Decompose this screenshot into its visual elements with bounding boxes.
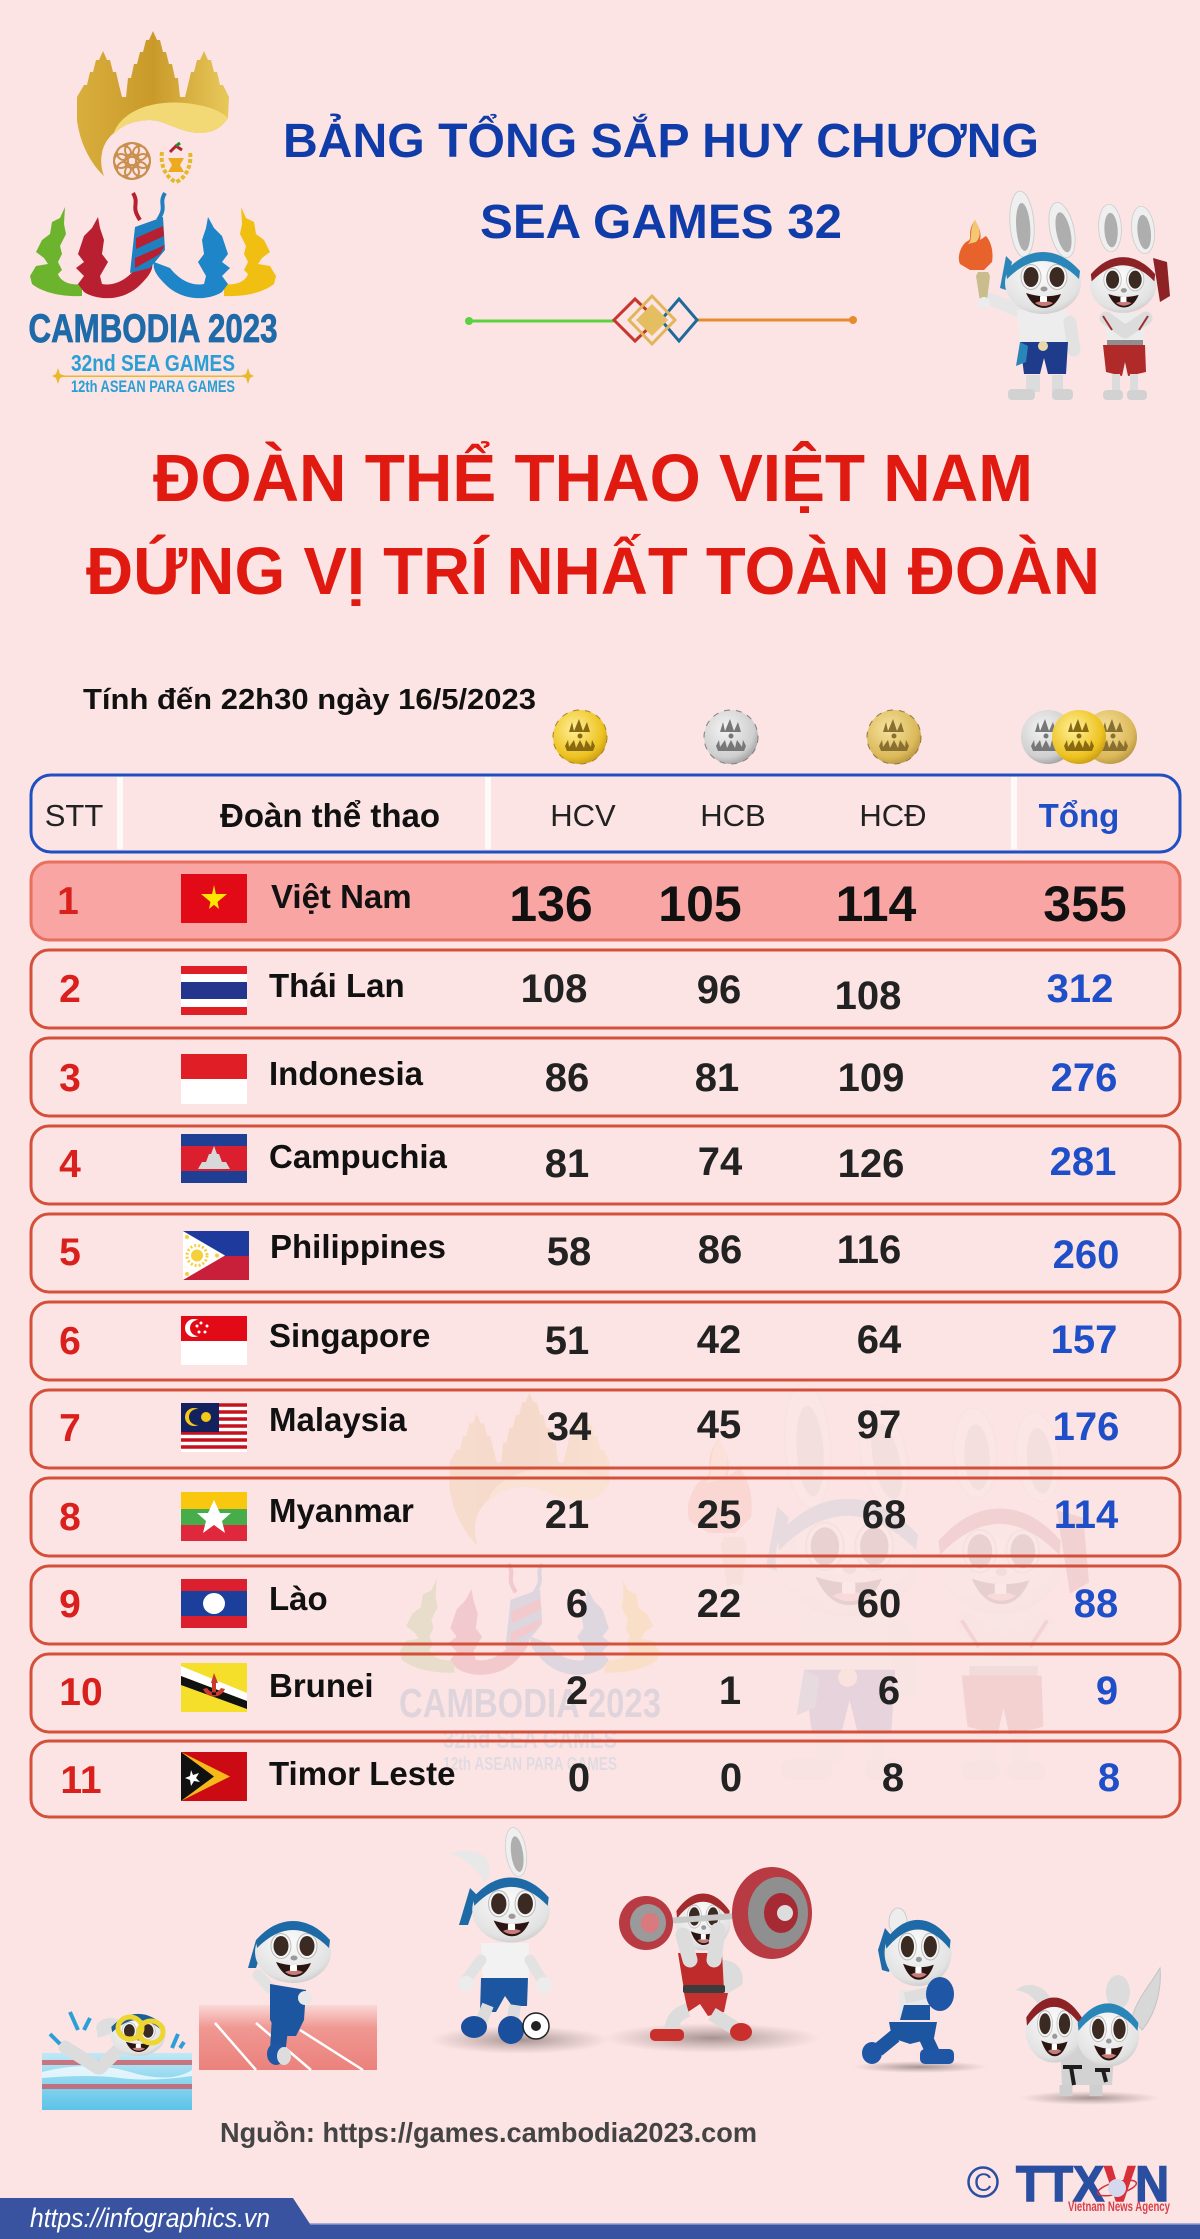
crown [77,31,229,176]
row 3: Indonesia: 276 [1051,1056,1117,1100]
row 5: Philippines: 5 [59,1231,81,1274]
row 6: Singapore: 51 [545,1319,589,1363]
row 4: Campuchia: Campuchia [269,1138,448,1175]
logo para games: 12th ASEAN PARA GAMES [71,377,235,396]
flag: Singapore [181,1316,247,1365]
icon: three medals [1021,710,1137,764]
logo: Cambodia 2023 SEA Games [28,31,278,396]
emblem: flower [114,143,150,179]
row 2: Thái Lan: 312 [1047,967,1113,1011]
logo wordmark: CAMBODIA 2023 [28,307,278,351]
flag: Vietnam [181,874,247,923]
row 8: Myanmar [31,1478,1180,1556]
row 1: Việt Nam: 136 [509,876,593,932]
row 3: Indonesia: 86 [545,1056,589,1100]
TTXVN logo [968,2156,1170,2214]
table header: Tổng [1039,797,1119,834]
row 7: Malaysia: 34 [547,1405,592,1449]
row 6: Singapore: 64 [857,1318,902,1362]
row 1: Việt Nam: Việt Nam [271,878,412,915]
row 11: Timor Leste: 0 [568,1756,590,1800]
row 4: Campuchia: 126 [838,1142,904,1186]
mascot: boxer [852,1908,988,2073]
row 9: Lào: Lào [269,1580,328,1617]
title ornament [465,296,857,344]
mascot: soccer player [430,1826,610,2054]
row 6: Singapore: 42 [697,1318,741,1362]
row 10: Brunei: 10 [59,1671,103,1714]
row 7: Malaysia: 176 [1053,1405,1119,1449]
row 4: Campuchia: 81 [545,1142,589,1186]
row 10: Brunei: Brunei [269,1667,374,1704]
row 2: Thái Lan: Thái Lan [269,967,405,1004]
faded watermark: logo and mascots: 32nd SEA GAMES [443,1726,617,1754]
footer bar [0,2198,1200,2239]
row 5: Philippines: Philippines [270,1228,446,1265]
flag: Indonesia [181,1054,247,1104]
row 8: Myanmar: 25 [697,1493,741,1537]
faded watermark: logo and mascots: 12th ASEAN PARA GAMES [443,1754,617,1774]
row 1: Việt Nam: 1 [57,880,79,923]
faded watermark: logo and mascots: CAMBODIA 2023 [399,1680,661,1726]
row 2: Thái Lan: 96 [697,968,741,1012]
row 9: Lào [31,1566,1180,1644]
icon: globe [1096,2177,1138,2199]
row 11: Timor Leste: 11 [60,1759,102,1802]
row 11: Timor Leste: Timor Leste [269,1755,455,1792]
row 9: Lào: 9 [59,1583,81,1626]
row 2: Thái Lan: 108 [521,967,587,1011]
mascot: weightlifter [604,1867,820,2053]
row 5: Philippines: 116 [837,1228,901,1272]
logo divider [52,368,254,384]
flag: Thailand [181,966,247,1015]
row 10: Brunei: 6 [878,1669,900,1713]
row 6: Singapore [31,1302,1180,1380]
flag: Myanmar [181,1492,247,1541]
row 3: Indonesia: Indonesia [269,1055,424,1092]
row 7: Malaysia [31,1390,1180,1468]
row 9: Lào: 60 [857,1582,901,1626]
row 6: Singapore: 157 [1051,1318,1117,1362]
row 7: Malaysia: 45 [697,1403,741,1447]
row 5: Philippines [31,1214,1180,1292]
logo subtitle: 32nd SEA GAMES [71,350,235,376]
table header [31,775,1180,852]
medals [553,710,1137,764]
row 5: Philippines: 86 [698,1228,742,1272]
row 4: Campuchia: 74 [698,1140,743,1184]
flag: Timor Leste [181,1752,247,1801]
row 2: Thái Lan [31,950,1180,1028]
headline: ĐOÀN THỂ THAO VIỆT NAM [153,441,1033,516]
row 7: Malaysia: 7 [59,1407,81,1450]
row 2: Thái Lan: 2 [59,968,81,1011]
faded watermark: logo and mascots [399,1381,1089,1780]
row 1: Việt Nam: 114 [836,876,917,932]
row 5: Philippines: 260 [1053,1233,1119,1277]
mascot: karate pair [1016,1968,1160,2105]
title: BẢNG TỔNG SẮP HUY CHƯƠNG [283,113,1039,168]
row 1: Việt Nam: 105 [658,876,742,932]
headline: ĐỨNG VỊ TRÍ NHẤT TOÀN ĐOÀN [86,534,1100,609]
row 10: Brunei [31,1654,1180,1732]
copyright mark: C [974,2169,992,2197]
row 3: Indonesia: 81 [695,1056,739,1100]
table header: HCB [700,798,766,833]
row 8: Myanmar: 114 [1054,1493,1119,1537]
table header: Đoàn thể thao [220,797,440,834]
row 10: Brunei: 1 [719,1669,741,1713]
flag: Cambodia [181,1134,247,1183]
row 3: Indonesia [31,1038,1180,1116]
icon: bronze medal [867,710,921,764]
agency wordmark: TTXVN [1016,2156,1169,2212]
row 5: Philippines: 58 [547,1230,591,1274]
footer bar: https://infographics.vn [30,2203,270,2233]
row 8: Myanmar: 21 [545,1493,589,1537]
row 4: Campuchia: 4 [59,1143,81,1186]
icon: gold medal [553,710,607,764]
row 11: Timor Leste: 8 [882,1756,904,1800]
naga symbol [30,193,276,298]
table header: STT [45,798,103,833]
row 8: Myanmar: Myanmar [269,1492,414,1529]
row 6: Singapore: Singapore [269,1317,430,1354]
row 7: Malaysia: Malaysia [269,1401,407,1438]
mascot: swimmer [42,2012,192,2110]
emblem: ASEAN [162,143,190,182]
row 9: Lào: 88 [1074,1582,1118,1626]
row 8: Myanmar: 68 [862,1493,906,1537]
girl mascot [1090,204,1170,400]
row 9: Lào: 22 [697,1582,741,1626]
headline [86,441,1100,609]
copyright mark [968,2168,998,2197]
title [283,113,1039,249]
row 10: Brunei: 2 [566,1669,588,1713]
icon: silver medal [704,710,758,764]
boy mascot with torch [959,190,1081,400]
title: SEA GAMES 32 [480,196,842,249]
date note: Tính đến 22h30 ngày 16/5/2023 [83,684,536,716]
row 11: Timor Leste: 0 [720,1756,742,1800]
row 10: Brunei: 9 [1096,1669,1118,1713]
row 1: Việt Nam [31,862,1180,940]
flag: Brunei [181,1663,247,1712]
table header: HCV [550,798,616,833]
row 4: Campuchia: 281 [1050,1140,1116,1184]
row 1: Việt Nam: 355 [1043,876,1127,932]
row 4: Campuchia [31,1126,1180,1204]
mascots: torch bearers [959,190,1170,400]
row 11: Timor Leste: 8 [1098,1756,1120,1800]
row 3: Indonesia: 3 [59,1057,81,1100]
row 7: Malaysia: 97 [857,1403,901,1447]
source line: Nguồn: https://games.cambodia2023.com [220,2117,757,2148]
flag: Philippines [183,1231,249,1280]
flag: Malaysia [181,1403,247,1452]
row 11: Timor Leste [31,1741,1180,1817]
table header: HCĐ [859,798,927,833]
row 8: Myanmar: 8 [59,1496,81,1539]
flag: Laos [181,1579,247,1628]
row 9: Lào: 6 [566,1582,588,1626]
mascot: runner [199,1921,377,2070]
row 2: Thái Lan: 108 [835,974,901,1018]
row 3: Indonesia: 109 [838,1056,904,1100]
row 6: Singapore: 6 [59,1320,81,1363]
